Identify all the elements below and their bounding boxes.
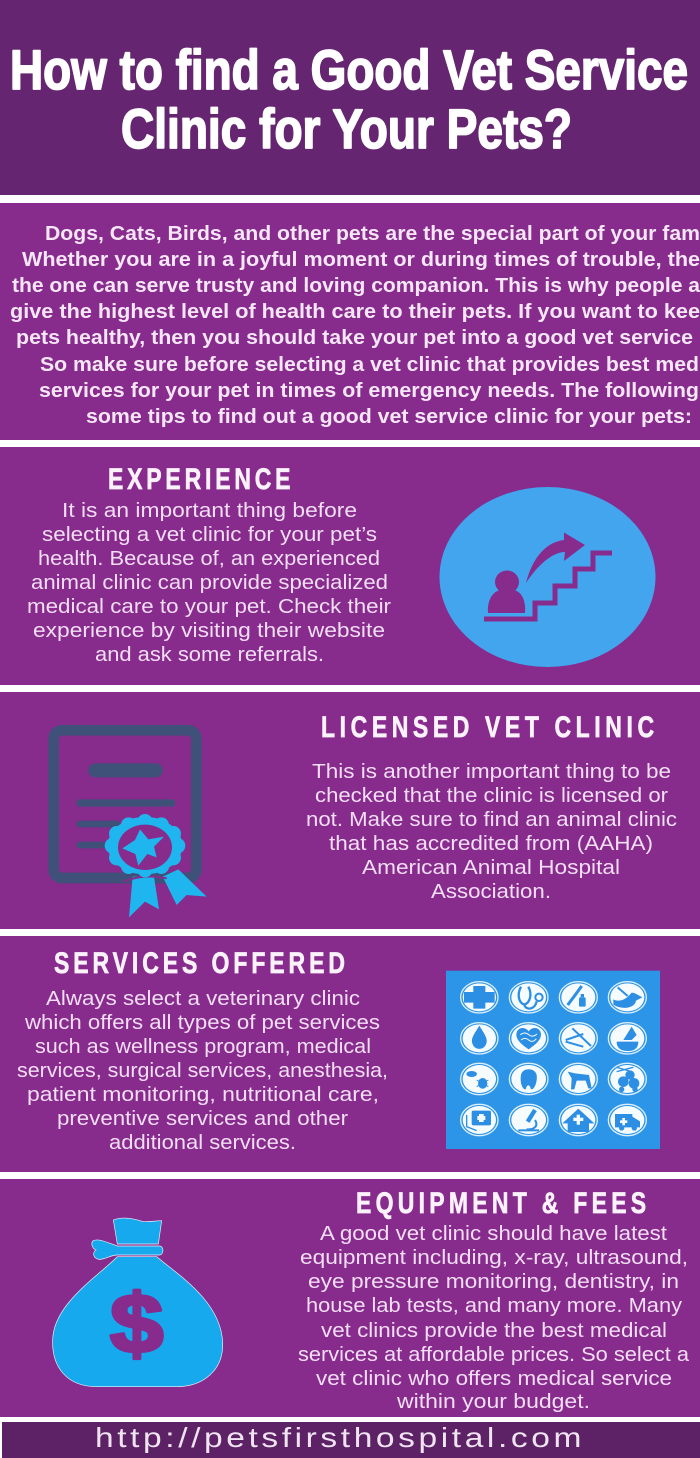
- icon: dog: [568, 1072, 592, 1089]
- intro text: So make sure before selecting a vet clinic that provides best med: [40, 354, 699, 376]
- footer bar: [2, 1422, 700, 1458]
- icon: water drop: [472, 1026, 487, 1049]
- services text: services, surgical services, anesthesia,: [17, 1059, 388, 1082]
- intro text: [10, 223, 700, 428]
- intro text: some tips to find out a good vet service clinic for your pets:: [86, 406, 692, 428]
- experience text: and ask some referrals.: [95, 643, 324, 666]
- icon: syringe and bottle: [568, 986, 586, 1007]
- icon: medical cross: [464, 986, 495, 1009]
- licensed text: checked that the clinic is licensed or: [315, 784, 668, 807]
- equipment text: services at affordable prices. So select a: [298, 1343, 690, 1366]
- website url: http://petsfirsthospital.com: [95, 1422, 585, 1453]
- intro text: the one can serve trusty and loving companion. This is why people a: [12, 275, 700, 297]
- licensed text: not. Make sure to find an animal clinic: [306, 808, 677, 831]
- title: Clinic for Your Pets?: [121, 97, 572, 160]
- licensed text: American Animal Hospital: [362, 856, 620, 879]
- licensed text: Association.: [431, 880, 551, 903]
- services text: [17, 987, 388, 1154]
- equipment text: within your budget.: [396, 1390, 590, 1413]
- panel: experience: [0, 447, 700, 685]
- licensed text: [306, 760, 677, 903]
- heading: equipment and fees: EQUIPMENT & FEES: [356, 1186, 646, 1220]
- intro text: give the highest level of health care to their pets. If you want to kee: [10, 301, 700, 323]
- equipment text: vet clinics provide the best medical: [321, 1319, 667, 1342]
- experience text: animal clinic can provide specialized: [31, 571, 388, 594]
- panel: introduction: [0, 203, 700, 440]
- icon: money bag: [53, 1218, 223, 1387]
- intro text: Dogs, Cats, Birds, and other pets are the special part of your fam: [45, 223, 700, 245]
- header panel: [0, 0, 700, 195]
- intro text: services for your pet in times of emergency needs. The following: [39, 380, 699, 402]
- services text: such as wellness program, medical: [35, 1035, 371, 1058]
- title: [10, 38, 688, 160]
- equipment text: house lab tests, and many more. Many: [306, 1294, 683, 1317]
- icon: poodle and clippers: [617, 1067, 639, 1092]
- experience text: It is an important thing before: [62, 499, 357, 522]
- services text: which offers all types of pet services: [24, 1011, 380, 1034]
- equipment text: vet clinic who offers medical service: [316, 1367, 672, 1390]
- services text: additional services.: [109, 1131, 296, 1154]
- equipment text: [298, 1222, 690, 1413]
- licensed text: that has accredited from (AAHA): [329, 832, 653, 855]
- heading: licensed vet clinic: LICENSED VET CLINIC: [321, 710, 654, 744]
- experience text: [27, 499, 391, 666]
- icon: dog with scalpel: [613, 987, 642, 1008]
- services text: preventive services and other: [57, 1107, 348, 1130]
- icon: heart with waves: [516, 1028, 541, 1049]
- equipment text: A good vet clinic should have latest: [320, 1222, 667, 1245]
- licensed text: This is another important thing to be: [312, 760, 671, 783]
- experience text: selecting a vet clinic for your pet’s: [42, 523, 377, 546]
- heading: experience: EXPERIENCE: [108, 462, 291, 496]
- panel: services offered: [0, 936, 700, 1172]
- icon: flea and tick: [466, 1071, 488, 1089]
- panel: licensed vet clinic: [0, 692, 700, 929]
- equipment text: equipment including, x-ray, ultrasound,: [300, 1246, 688, 1269]
- experience text: health. Because of, an experienced: [38, 547, 380, 570]
- icon: ambulance: [615, 1114, 640, 1131]
- services text: patient monitoring, nutritional care,: [27, 1083, 379, 1106]
- equipment text: eye pressure monitoring, dentistry, in: [308, 1270, 679, 1293]
- icon: certificate with ribbon: [54, 730, 207, 917]
- experience text: medical care to your pet. Check their: [27, 595, 391, 618]
- icon: first aid kit: [467, 1111, 491, 1131]
- icon: stethoscope: [519, 987, 543, 1009]
- intro text: pets healthy, then you should take your pet into a good vet service: [16, 327, 693, 349]
- icon: tooth: [521, 1069, 537, 1089]
- icon: clinic house: [562, 1109, 594, 1132]
- icon: microscope: [518, 1110, 539, 1131]
- intro text: Whether you are in a joyful moment or during times of trouble, the: [22, 249, 700, 271]
- icon grid: veterinary services: [446, 971, 660, 1149]
- services text: Always select a veterinary clinic: [46, 987, 360, 1010]
- dollar sign: $: [110, 1278, 163, 1371]
- experience text: experience by visiting their website: [33, 619, 385, 642]
- icon: person climbing stairs: [440, 487, 656, 667]
- heading: services offered: SERVICES OFFERED: [54, 946, 345, 980]
- panel: equipment and fees: [0, 1179, 700, 1417]
- icon: pet in bath: [617, 1027, 638, 1051]
- icon: scissors and file: [566, 1028, 591, 1047]
